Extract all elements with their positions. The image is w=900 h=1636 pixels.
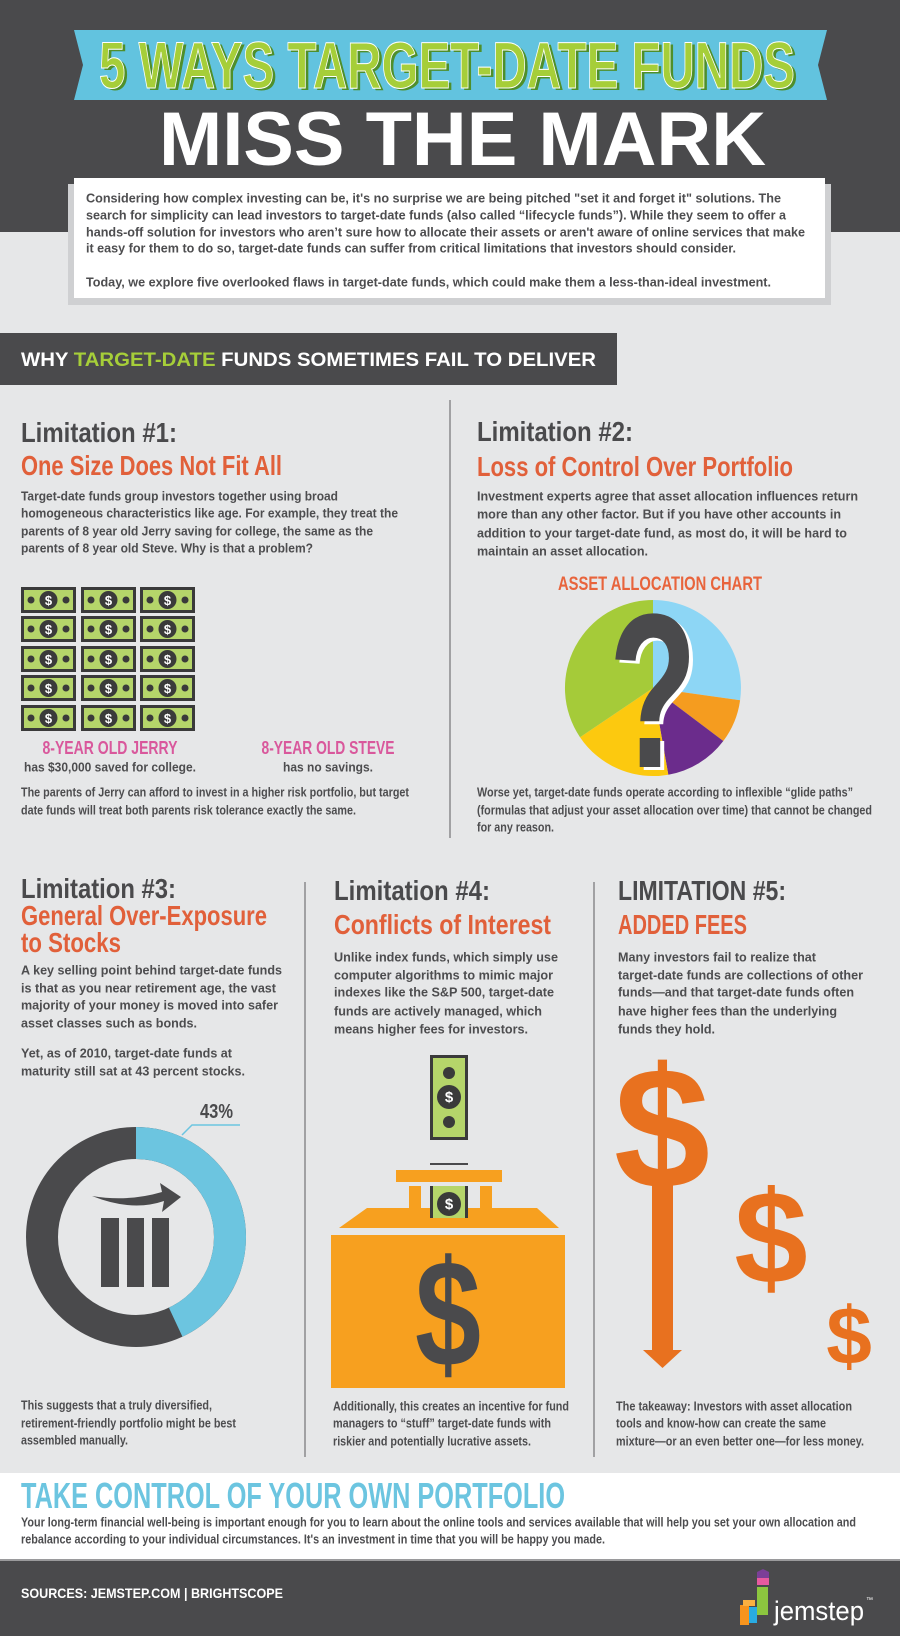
- sources: SOURCES: JEMSTEP.COM | BRIGHTSCOPE: [21, 1585, 283, 1601]
- panel: take control: [0, 1473, 900, 1559]
- intro text box: search for simplicity can lead investors to target-date funds (also called “lifecycle funds”). While they seem to offer a: [86, 208, 787, 222]
- text: jerry conclusion: date funds will treat both parents risk tolerance exactly the same.: [21, 802, 356, 818]
- icon: stack of bills: $: [164, 711, 172, 726]
- icon: stack of bills: $: [45, 593, 53, 608]
- icon: question mark: ?: [609, 569, 697, 814]
- callout: 43%: 43%: [200, 1101, 233, 1123]
- body 2: Investment experts agree that asset allocation influences return: [477, 488, 858, 504]
- icon: stack of bills: $: [105, 622, 113, 637]
- heading 2: Limitation #2:: [477, 416, 633, 447]
- conclusion 3: This suggests that a truly diversified,: [21, 1398, 212, 1412]
- pie chart: [565, 569, 741, 817]
- body 3: [21, 962, 282, 1078]
- footer: [0, 1559, 900, 1636]
- panel: limitation 5: [614, 875, 872, 1448]
- icon: stack of bills: $: [164, 652, 172, 667]
- icon: stack of bills: $: [164, 681, 172, 696]
- donut chart 43%: [42, 1101, 240, 1331]
- body 1: Target-date funds group investors together using broad: [21, 488, 338, 504]
- subheading 5: ADDED FEES: [618, 909, 747, 940]
- icon: stack of bills: $: [45, 681, 53, 696]
- section banner: [0, 333, 617, 385]
- intro text box: it easy for them to do so, target-date funds can suffer from critical limitations that investors should consider.: [86, 240, 736, 256]
- icon: bill into bank box: $: [445, 1089, 454, 1106]
- conclusion 4: [333, 1398, 569, 1448]
- body 2: [477, 488, 858, 558]
- body 3: asset classes such as bonds.: [21, 1016, 197, 1030]
- logo: jemstep: jemstep: [773, 1596, 864, 1626]
- conclusion 4: riskier and potentially lucrative assets.: [333, 1434, 531, 1448]
- icon: stack of bills: $: [45, 622, 53, 637]
- icon: bill into bank box: $: [445, 1196, 454, 1213]
- label: steve: 8-YEAR OLD STEVE: [262, 738, 394, 758]
- label: steve: has no savings.: [283, 760, 373, 774]
- title: miss the mark: MISS THE MARK: [159, 97, 766, 182]
- label: jerry: has $30,000 saved for college.: [24, 760, 196, 774]
- subheading 1: One Size Does Not Fit All: [21, 450, 282, 481]
- take control text: [21, 1514, 856, 1546]
- icon: stack of bills: $: [105, 711, 113, 726]
- body 2: more than any other factor. But if you have other accounts in: [477, 506, 841, 522]
- conclusion 4: managers to “stuff” target-date funds with: [333, 1416, 551, 1430]
- body 4: computer algorithms to mimic major: [334, 968, 553, 982]
- subheading 3: General Over-Exposure: [21, 900, 267, 931]
- conclusion 5: The takeaway: Investors with asset allocation: [616, 1398, 852, 1414]
- intro text box: [68, 178, 831, 305]
- body 5: have higher fees than the underlying: [618, 1004, 837, 1018]
- body 5: funds—and that target-date funds often: [618, 984, 854, 1000]
- panel: limitation 1: [21, 417, 410, 818]
- icon: shrinking dollar signs: $: [826, 1291, 872, 1382]
- body 5: funds they hold.: [618, 1022, 715, 1036]
- subheading 2: Loss of Control Over Portfolio: [477, 451, 793, 482]
- body 1: parents of 8 year old Jerry saving for college, the same as the: [21, 524, 373, 538]
- icon: shrinking dollar signs: $: [734, 1164, 808, 1311]
- body 4: funds are actively managed, which: [334, 1004, 542, 1018]
- take control text: rebalance according to your individual circumstances. It's an investment in time that you will be happy you made.: [21, 1532, 605, 1546]
- body 2b: [477, 784, 872, 834]
- body 3: Yet, as of 2010, target-date funds at: [21, 1046, 233, 1060]
- icon: stack of bills: $: [105, 593, 113, 608]
- header background: [0, 0, 900, 232]
- heading 4: Limitation #4:: [334, 875, 490, 906]
- icon: stack of bills: $: [164, 593, 172, 608]
- intro text box: Considering how complex investing can be, it's no surprise we are being pitched "set it and forget it" solutions. The: [86, 190, 781, 206]
- body 5: [618, 950, 863, 1036]
- callout: 43%: [182, 1101, 240, 1135]
- conclusion 3: [21, 1398, 237, 1448]
- conclusion 5: tools and know-how can create the same: [616, 1416, 826, 1430]
- body 4: means higher fees for investors.: [334, 1022, 528, 1036]
- label: jerry: [24, 738, 196, 774]
- icon: stack of bills: $: [45, 711, 53, 726]
- icon: stack of bills: [21, 587, 195, 731]
- body 5: target-date funds are collections of other: [618, 968, 863, 982]
- panel: limitation 2: [477, 416, 872, 834]
- icon: bill into bank box: $: [415, 1229, 481, 1398]
- chart title: ASSET ALLOCATION CHART: [558, 574, 762, 595]
- intro text box: hands-off solution for investors who aren’t sure how to allocate their assets or aren't aware of online services that make: [86, 224, 805, 240]
- label: jerry: 8-YEAR OLD JERRY: [42, 738, 178, 758]
- label: steve: [262, 738, 394, 774]
- subheading 3: to Stocks: [21, 927, 121, 958]
- body 4: [334, 950, 558, 1036]
- conclusion 3: retirement-friendly portfolio might be best: [21, 1416, 237, 1430]
- body 3: A key selling point behind target-date funds: [21, 962, 282, 978]
- body 1: homogeneous characteristics like age. For example, they treat the: [21, 506, 398, 520]
- logo: jemstep: ™: [866, 1597, 873, 1604]
- icon: shrinking dollar signs: $: [614, 1031, 710, 1225]
- body 1: [21, 488, 398, 556]
- icon: stack of bills: $: [164, 622, 172, 637]
- icon: stack of bills: $: [45, 652, 53, 667]
- icon: stack of bills: $: [105, 652, 113, 667]
- take control heading: TAKE CONTROL OF YOUR OWN PORTFOLIO: [21, 1475, 565, 1516]
- text: jerry conclusion: The parents of Jerry can afford to invest in a higher risk portfolio, but target: [21, 784, 410, 800]
- body 2: addition to your target-date fund, as most do, it will be hard to: [477, 526, 847, 540]
- body 2: maintain an asset allocation.: [477, 544, 648, 558]
- heading 3: Limitation #3:: [21, 873, 176, 904]
- text: jerry conclusion: [21, 784, 410, 818]
- body 4: Unlike index funds, which simply use: [334, 950, 558, 964]
- panel: limitation 4: [331, 875, 569, 1448]
- icon: question mark: ?: [613, 572, 701, 817]
- icon: shrinking dollar signs: [614, 1031, 872, 1382]
- icon: bill into bank box: [331, 1055, 565, 1398]
- subheading 4: Conflicts of Interest: [334, 909, 551, 940]
- conclusion 4: Additionally, this creates an incentive for fund: [333, 1398, 569, 1414]
- body 2b: for any reason.: [477, 820, 554, 834]
- conclusion 3: assembled manually.: [21, 1432, 128, 1448]
- intro text box: Today, we explore five overlooked flaws in target-date funds, which could make them a less-than-ideal investment.: [86, 274, 771, 290]
- conclusion 5: [616, 1398, 864, 1448]
- icon: stack of bills: $: [105, 681, 113, 696]
- body 3: is that as you near retirement age, the vast: [21, 980, 277, 996]
- heading 1: Limitation #1:: [21, 417, 177, 448]
- icon: shifting bars: [92, 1183, 181, 1287]
- body 4: indexes like the S&P 500, target-date: [334, 984, 554, 1000]
- body 5: Many investors fail to realize that: [618, 950, 817, 964]
- logo: jemstep: [740, 1569, 873, 1626]
- panel: limitation 3: [21, 873, 282, 1448]
- subheading 3: [21, 900, 267, 958]
- heading 5: LIMITATION #5:: [618, 875, 786, 906]
- body 1: parents of 8 year old Steve. Why is that a problem?: [21, 540, 313, 556]
- section banner: WHY TARGET-DATE FUNDS SOMETIMES FAIL TO DELIVER: [21, 350, 596, 371]
- body 3: majority of your money is moved into safer: [21, 998, 278, 1012]
- body 3: maturity still sat at 43 percent stocks.: [21, 1064, 245, 1078]
